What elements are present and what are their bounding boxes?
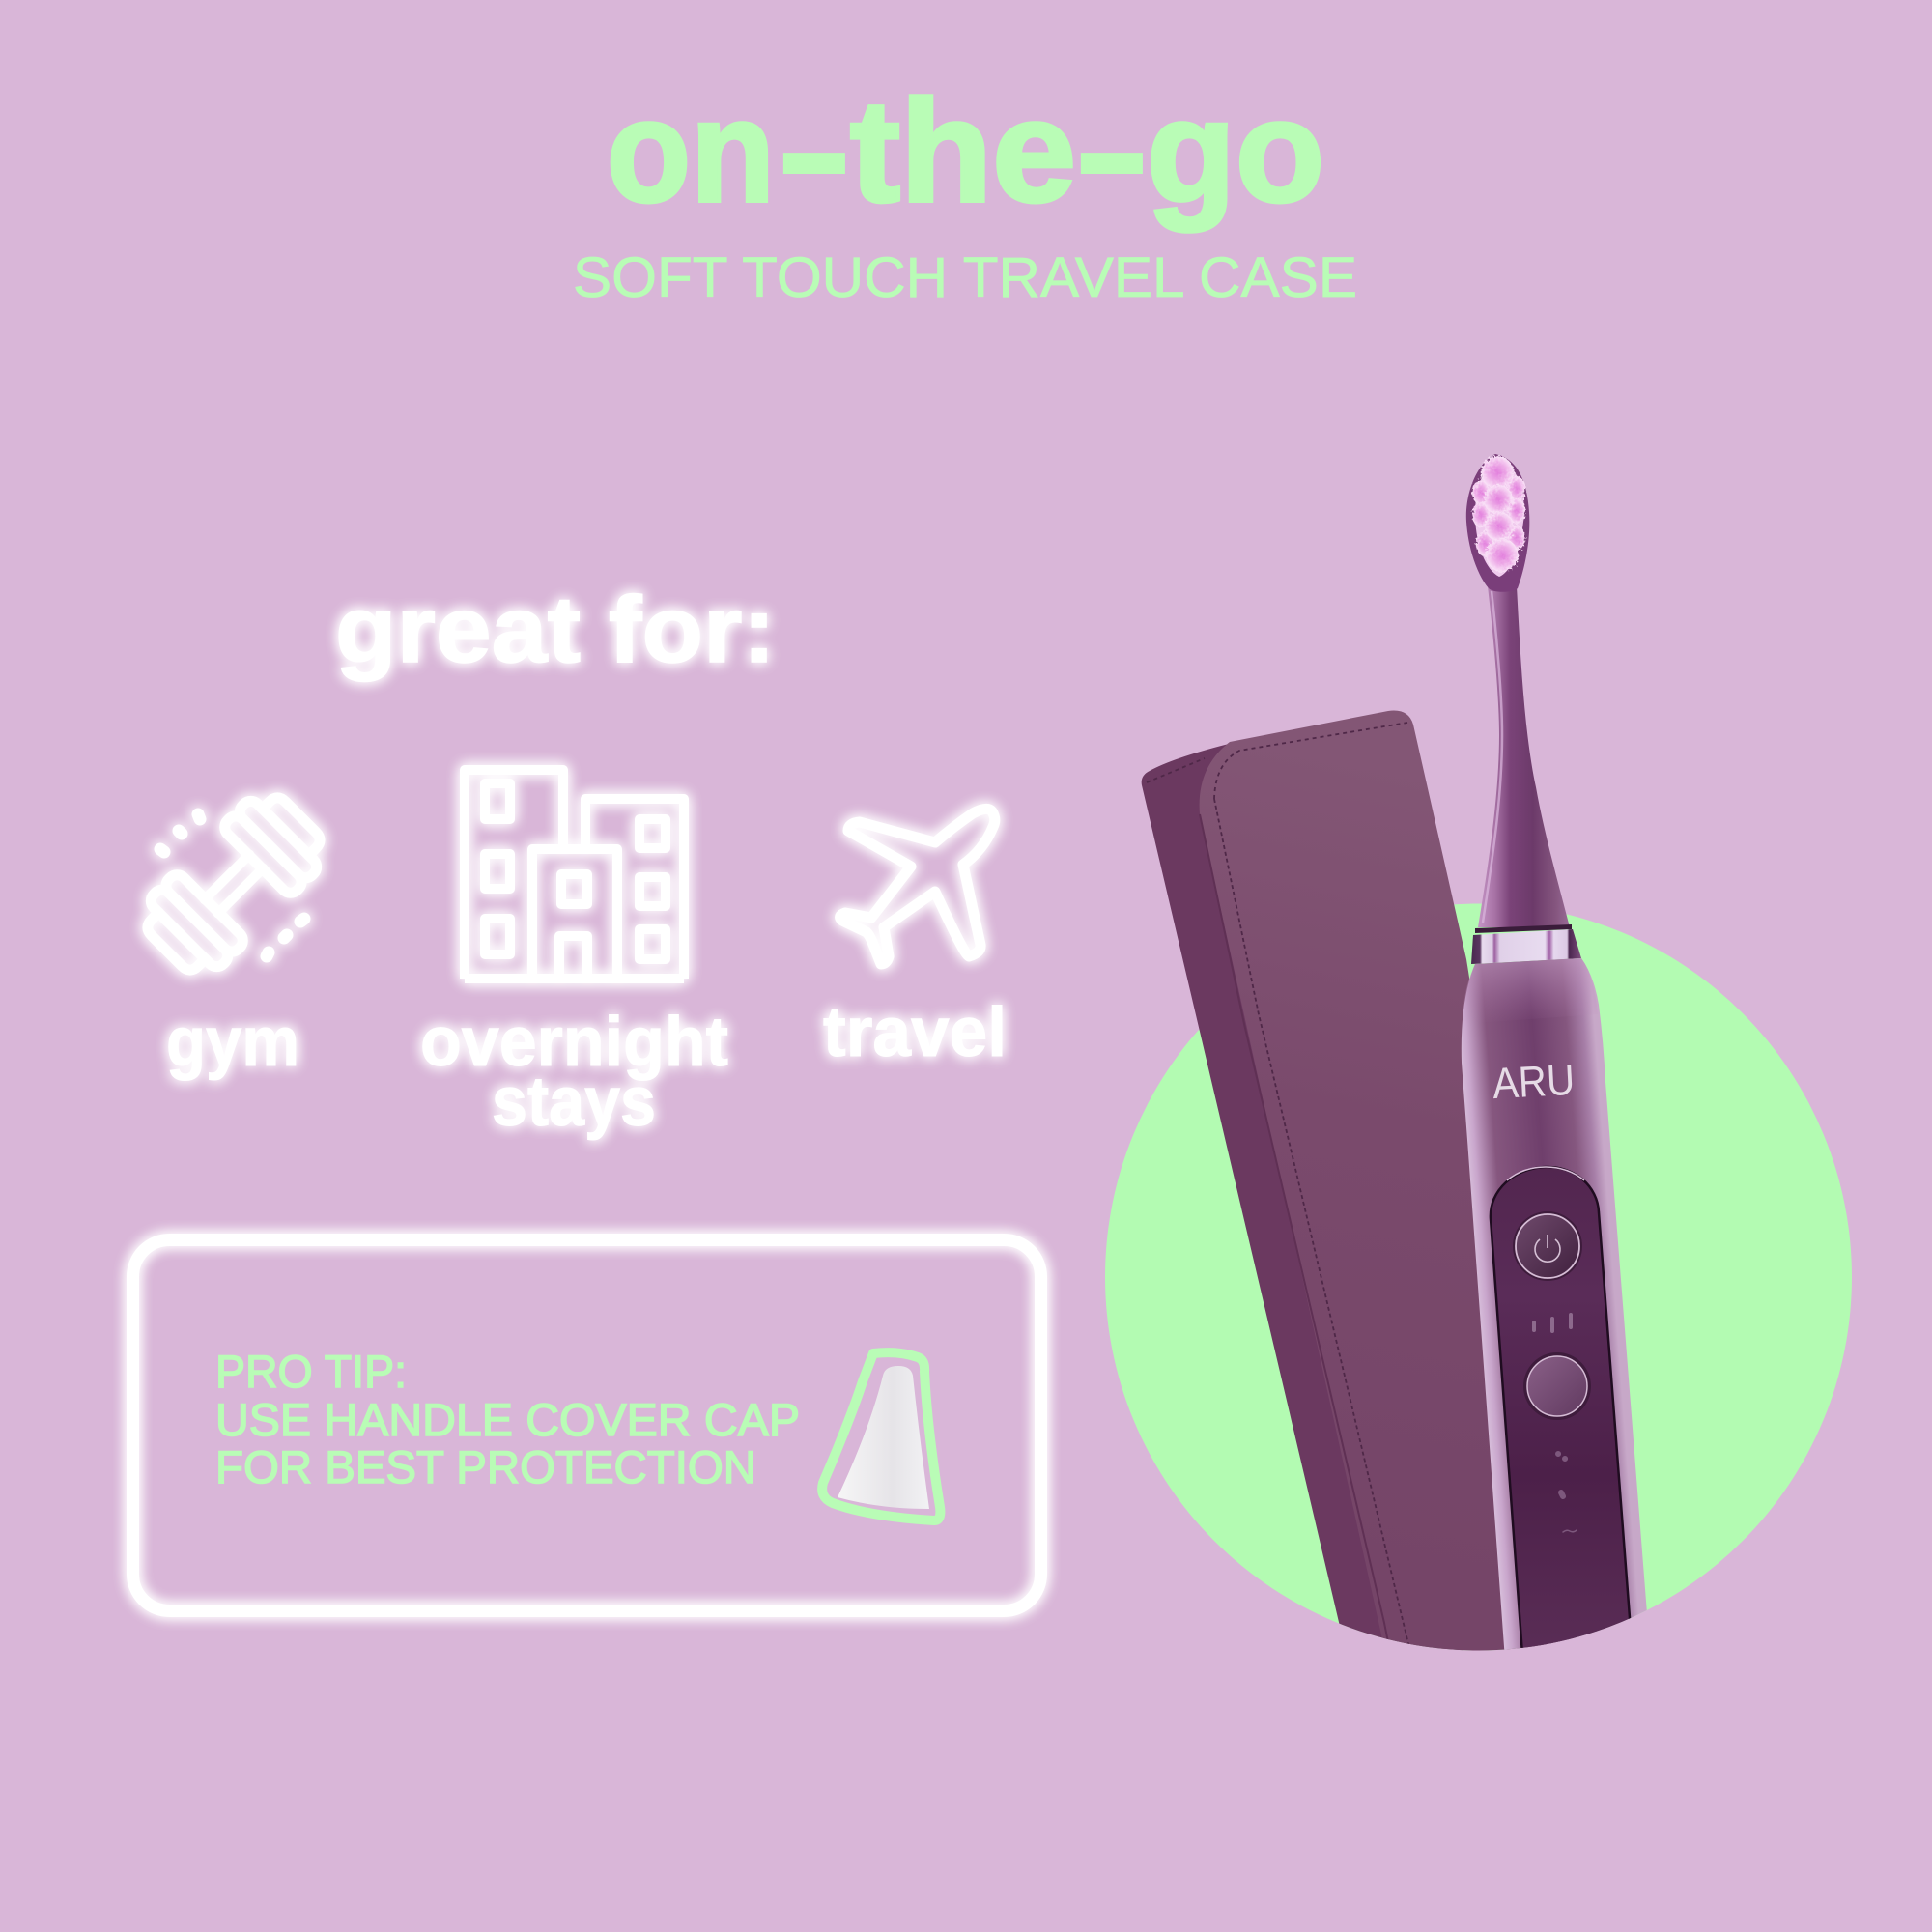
title: go <box>1147 70 1324 232</box>
title: - <box>778 70 851 232</box>
panel: pro tip <box>133 1240 1041 1611</box>
label: gym: gym <box>166 1004 299 1081</box>
title: on <box>607 70 775 232</box>
pro tip text <box>215 1346 800 1492</box>
label: travel: travel <box>823 994 1007 1071</box>
title: the <box>850 70 1076 232</box>
pro tip text: FOR BEST PROTECTION <box>215 1441 756 1492</box>
toothbrush collar <box>1471 924 1581 964</box>
icon: airplane <box>840 809 995 964</box>
subtitle: SOFT TOUCH TRAVEL CASE <box>573 246 1357 309</box>
indicator lights <box>1534 1315 1571 1331</box>
brand logo: ARU <box>1492 1055 1576 1108</box>
icon: buildings <box>465 770 684 979</box>
handle shoulder shine <box>1463 958 1584 1010</box>
infographic canvas <box>117 94 1852 1650</box>
icon: handle cover cap <box>822 1352 940 1520</box>
mode icons <box>1558 1454 1577 1532</box>
power button <box>1513 1211 1582 1281</box>
toothbrush head <box>1466 454 1529 592</box>
icon: dumbbell <box>132 782 335 985</box>
toothbrush neck <box>1478 586 1570 927</box>
travel case <box>1142 711 1584 1700</box>
pro tip text: USE HANDLE COVER CAP <box>215 1394 800 1445</box>
pro tip text: PRO TIP: <box>215 1346 407 1397</box>
product: travel case and toothbrush <box>1142 454 1654 1700</box>
label: overnight stays <box>420 1004 728 1141</box>
title: - <box>1075 70 1149 232</box>
green circle <box>1105 904 1852 1650</box>
mode button <box>1523 1352 1591 1420</box>
control panel <box>1491 1167 1634 1681</box>
toothbrush handle <box>1462 958 1654 1700</box>
label: overnight stays: overnight <box>420 1004 728 1081</box>
heading: great for: great for: <box>335 577 776 682</box>
label: overnight stays: stays <box>492 1064 656 1141</box>
